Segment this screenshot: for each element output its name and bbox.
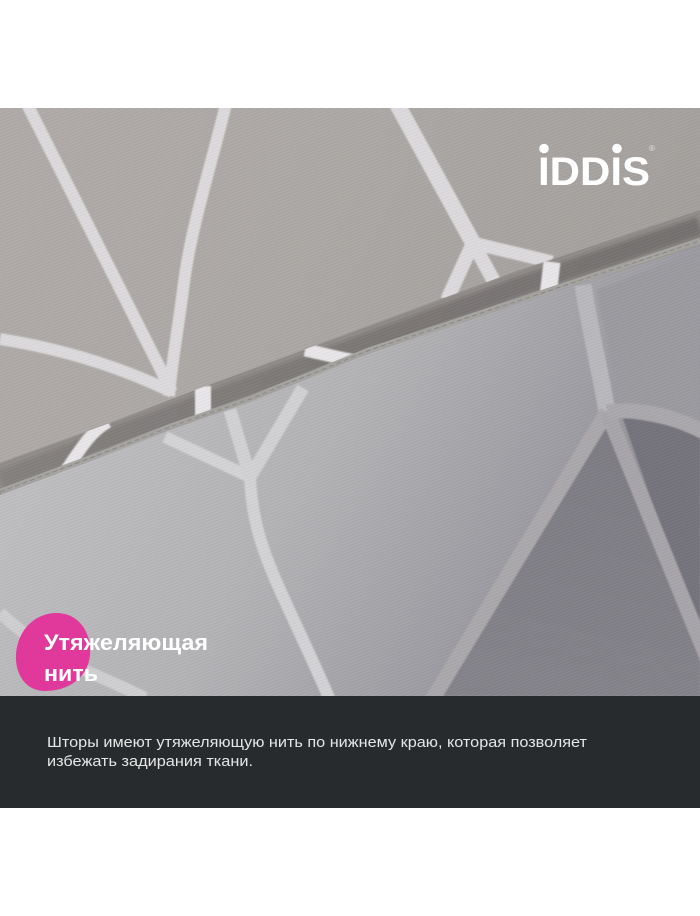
- photo: lower curtain fabric with muted lines: [0, 240, 700, 700]
- logo: IDDIS: ®: [649, 144, 655, 153]
- panel: dark fabric facet: [444, 429, 700, 696]
- description text: избежать задирания ткани.: [47, 753, 253, 770]
- photo: upper curtain fabric with white lines: [0, 104, 700, 488]
- badge: pink blob behind heading: [16, 613, 90, 691]
- hem stripes: [62, 262, 552, 476]
- hem shadow band: [0, 226, 700, 480]
- footer panel: [0, 696, 700, 808]
- stitched edge: [0, 241, 700, 492]
- logo: IDDIS: IDDIS: [538, 150, 650, 194]
- panel: far right dark facet: [622, 418, 700, 620]
- heading: [44, 630, 208, 686]
- panel: right fabric facet: [596, 250, 700, 432]
- heading: нить: [44, 661, 98, 686]
- description text: Шторы имеют утяжеляющую нить по нижнему краю, которая позволяет: [47, 734, 587, 751]
- curtain hem fold: [0, 200, 700, 500]
- heading: Утяжеляющая: [44, 630, 208, 655]
- description text: [47, 734, 587, 770]
